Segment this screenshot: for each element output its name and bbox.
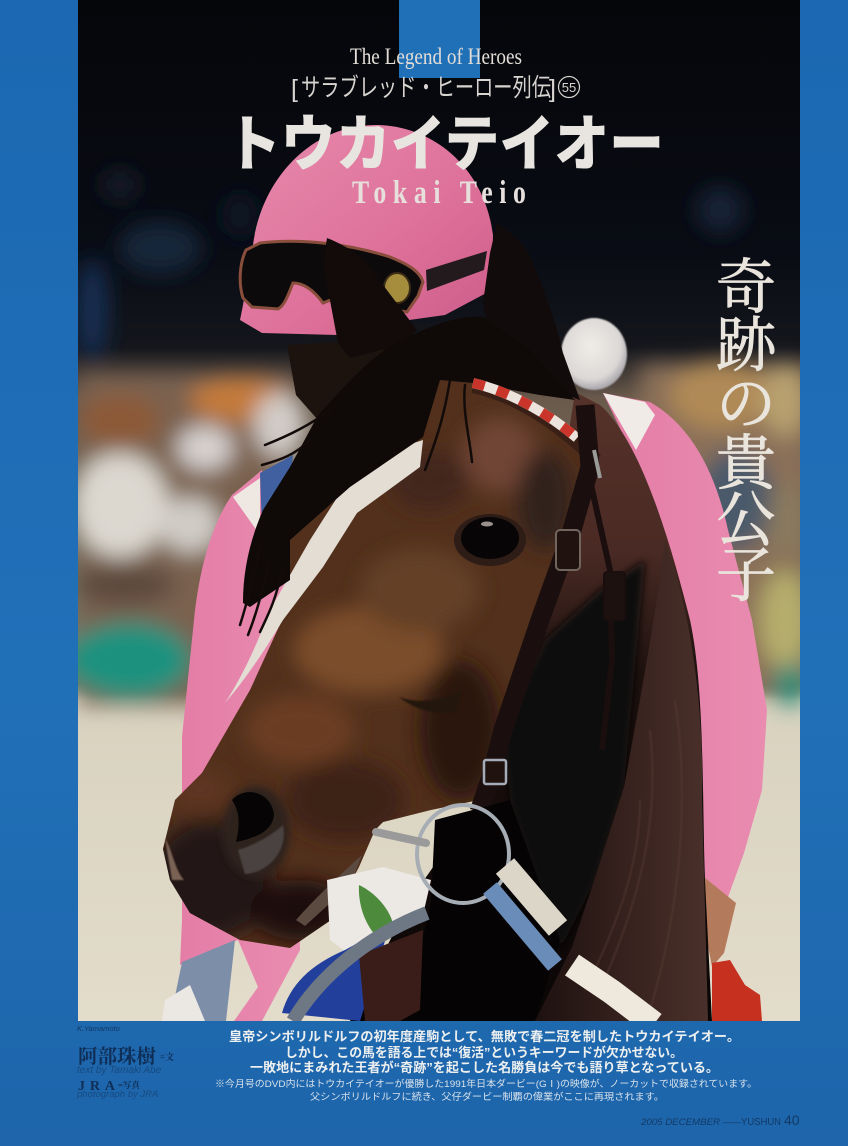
mouth	[296, 855, 362, 926]
author credit: 阿部珠樹	[78, 1045, 157, 1068]
left shoulder colours	[233, 455, 293, 535]
DVD note: ※今月号のDVD内にはトウカイテイオーが優勝した1991年日本ダービー(GⅠ)の映像が、ノーカットで収録されています。	[215, 1078, 757, 1090]
blurred crowd background	[68, 169, 811, 707]
jockey goggles	[240, 241, 487, 312]
lead chain and white leather	[490, 866, 654, 1024]
vertical headline: 跡	[716, 313, 779, 379]
jockey hand	[704, 877, 736, 967]
author credit: =文	[160, 1051, 174, 1062]
metal ring bit	[376, 805, 509, 903]
white pom pom	[561, 318, 627, 390]
vertical headline	[716, 255, 780, 609]
horse head	[163, 380, 590, 948]
folio: 2005 DECEMBER	[640, 1117, 721, 1127]
author credit: photograph by JRA	[76, 1089, 158, 1100]
folio	[640, 1112, 800, 1128]
folio: YUSHUN	[741, 1117, 781, 1128]
folio: ——	[723, 1117, 741, 1127]
glove	[170, 940, 235, 1021]
jockey face shadow	[287, 342, 386, 418]
DVD note: 父シンボリルドルフに続き、父仔ダービー制覇の偉業がここに再現されます。	[310, 1091, 664, 1103]
vertical headline: 公	[716, 488, 776, 554]
brown mane on neck	[535, 540, 708, 1021]
author credit	[76, 1045, 174, 1100]
photo credit: K.Yamamoto	[77, 1024, 120, 1033]
main title: トウカイテイオー	[226, 110, 664, 178]
vertical headline: 貴	[716, 431, 780, 497]
horse neck	[350, 392, 712, 1021]
horse eye	[454, 514, 526, 566]
nostril	[165, 786, 290, 880]
photo: jockey and horse	[68, 0, 811, 1024]
horse mane	[240, 317, 575, 635]
browband	[473, 383, 596, 460]
dark neck shadow	[506, 558, 648, 820]
folio: 40	[784, 1112, 800, 1128]
blue tab at top	[399, 0, 480, 78]
series subtitle: サラブレッド・ヒーロー列伝	[301, 74, 551, 102]
author credit: =写真	[118, 1080, 141, 1090]
reins	[293, 913, 427, 1021]
saddle cloth and jockey legs	[162, 867, 431, 1021]
DVD note	[215, 1078, 757, 1103]
horse right ear	[483, 223, 580, 400]
head shading	[150, 417, 573, 940]
bridle straps	[479, 405, 625, 812]
English name: Tokai Teio	[352, 175, 526, 211]
lead paragraph: しかし、この馬を語る上では“復活”というキーワードが欠かせない。	[285, 1045, 683, 1060]
jockey helmet	[240, 125, 493, 335]
neck hair highlights	[585, 700, 682, 1010]
white blaze	[225, 440, 423, 703]
series subtitle: 55	[562, 80, 576, 95]
series subtitle: [	[291, 75, 298, 103]
heading group	[226, 44, 664, 211]
red flowers	[712, 960, 762, 1021]
vertical headline: の	[716, 372, 776, 438]
vertical headline: 子	[716, 543, 776, 609]
black shadow under jaw	[422, 800, 560, 971]
author credit: text by Tamaki Abe	[77, 1065, 162, 1076]
horse left ear	[323, 238, 417, 358]
lead paragraph	[229, 1029, 740, 1075]
lead paragraph: 一敗地にまみれた王者が“奇跡”を起こした名勝負は今でも語り草となっている。	[250, 1060, 719, 1075]
jockey left sleeve	[180, 470, 300, 1021]
lead paragraph: 皇帝シンボリルドルフの初年度産駒として、無敗で春二冠を制したトウカイテイオー。	[229, 1029, 740, 1044]
vertical headline: 奇	[716, 255, 776, 321]
series title: The Legend of Heroes: The Legend of Heroes	[350, 44, 522, 69]
right shoulder white	[603, 393, 655, 450]
series subtitle: ]	[549, 75, 556, 103]
jockey right sleeve	[603, 393, 767, 897]
author credit: JRA	[78, 1079, 116, 1094]
